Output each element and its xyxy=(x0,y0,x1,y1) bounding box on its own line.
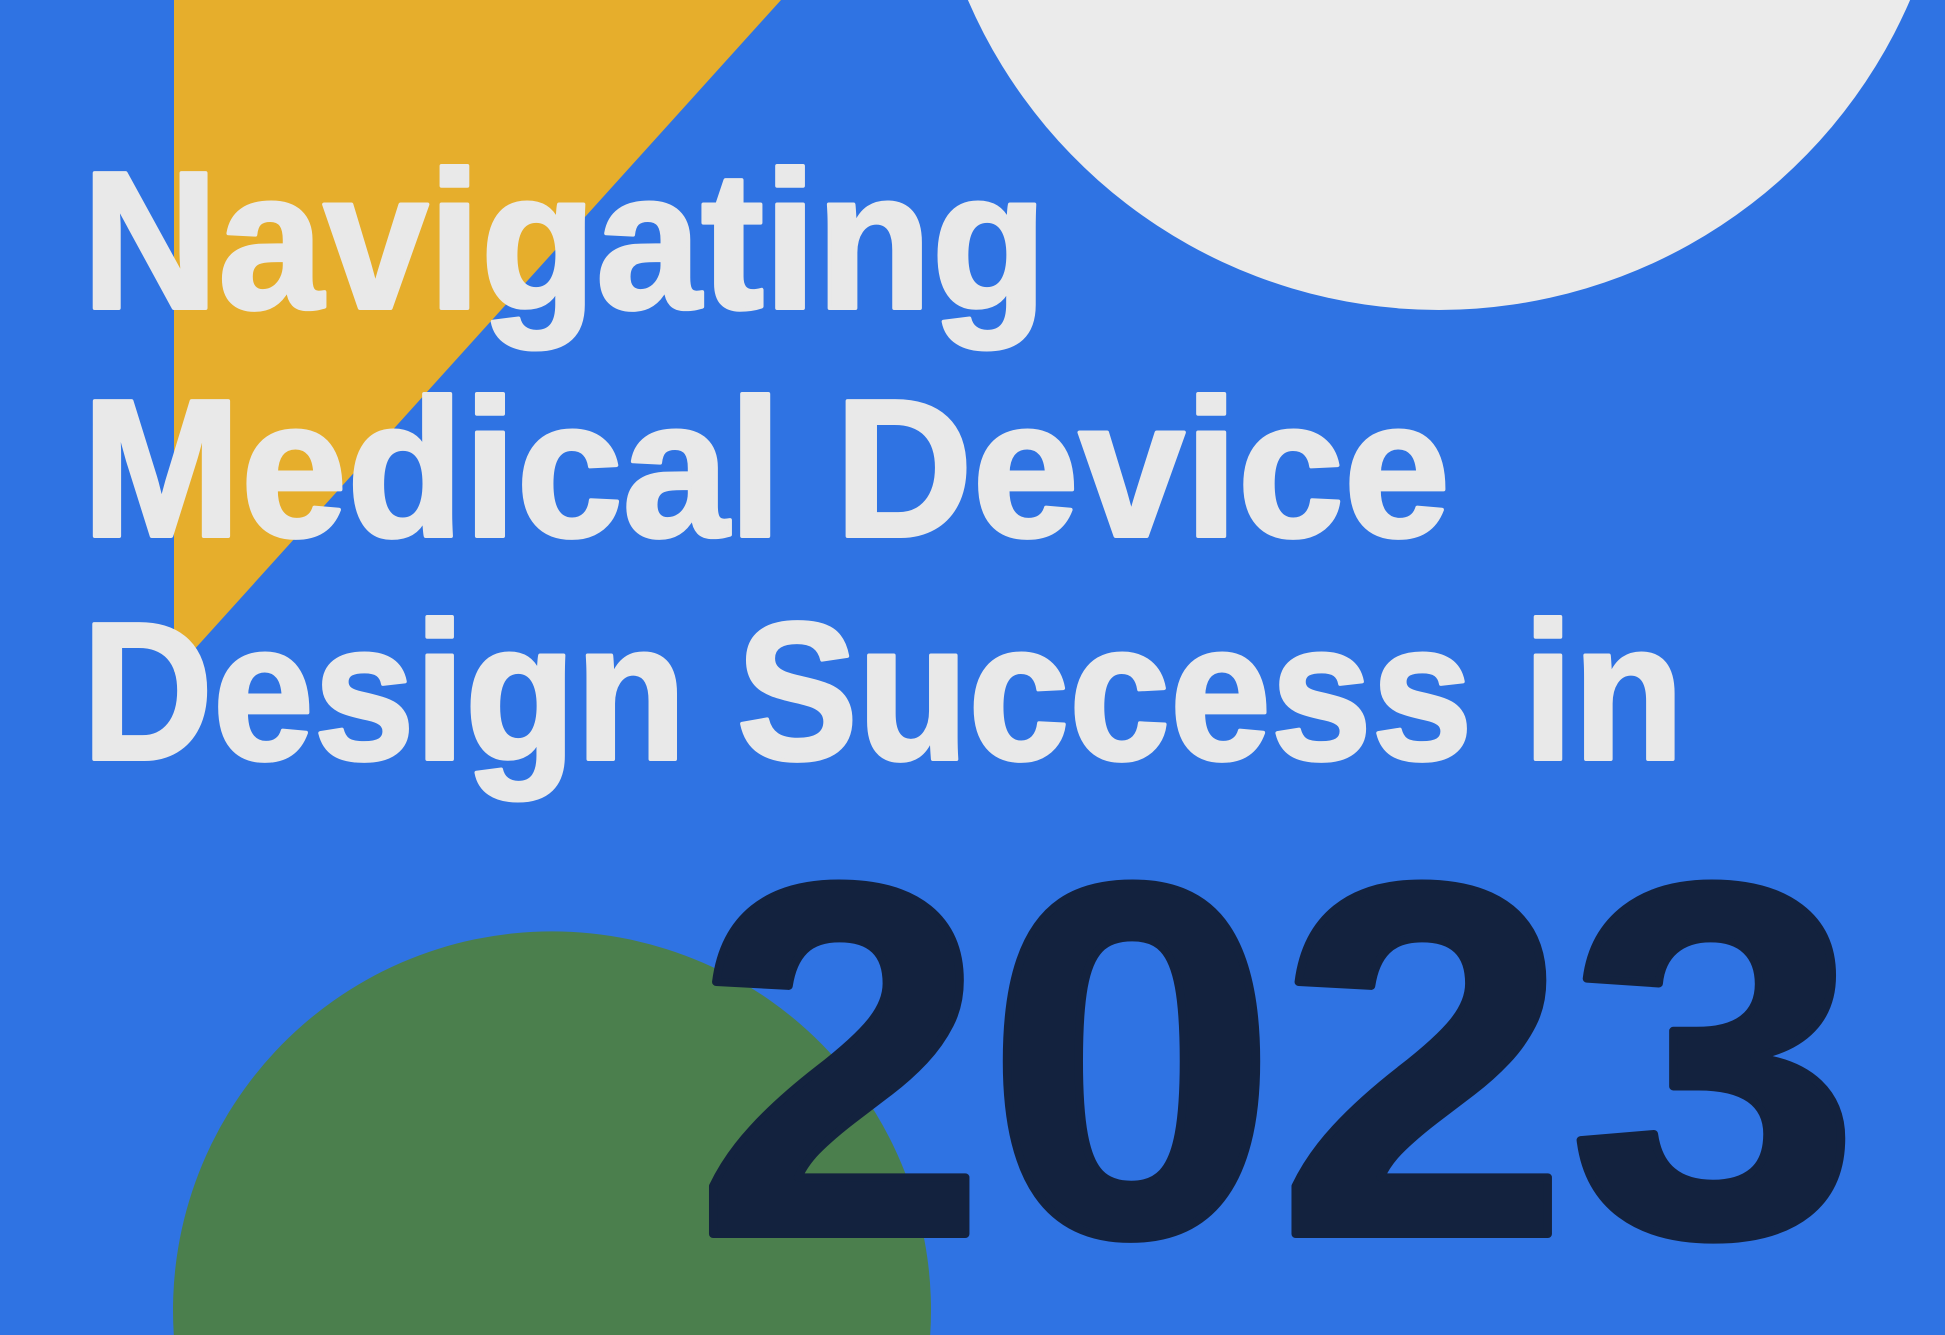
title: Medical Device xyxy=(82,359,1450,578)
year 2023: 2023 xyxy=(695,781,1860,1335)
yellow triangle shape xyxy=(174,0,781,672)
title xyxy=(82,131,1684,801)
title: Navigating xyxy=(82,131,1047,350)
green semicircle xyxy=(173,931,931,1335)
white circle xyxy=(968,0,1910,310)
title: Design Success in xyxy=(82,582,1684,801)
